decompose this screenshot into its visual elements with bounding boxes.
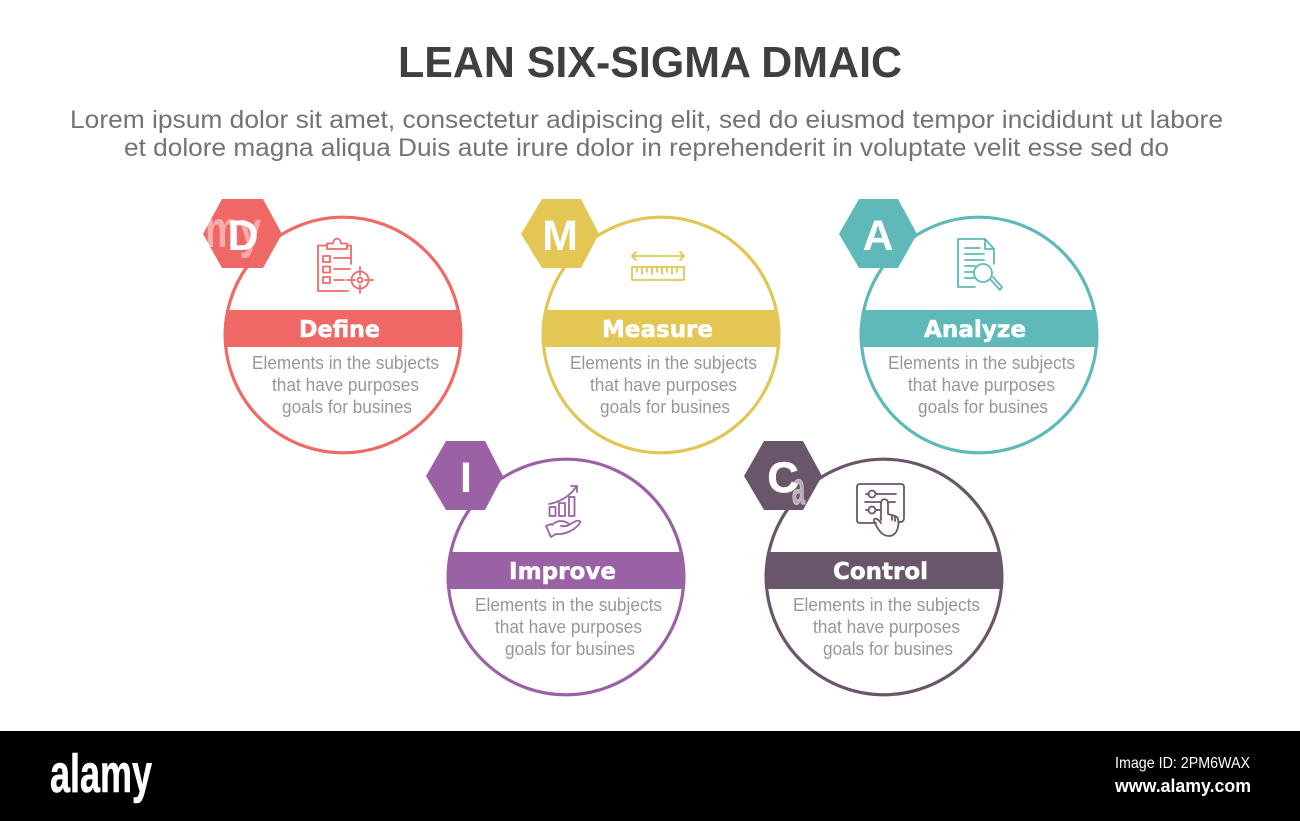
panel: improve: [426, 441, 689, 695]
heading band: [538, 310, 784, 347]
body text: that have purposes: [495, 617, 642, 637]
badge: M: M: [542, 212, 578, 260]
body text: goals for busines: [505, 639, 635, 659]
badge: C: a: [792, 463, 806, 514]
heading: Analyze: [924, 317, 1026, 343]
footer bar: [0, 731, 1300, 821]
heading: Control: [833, 559, 928, 585]
circle outline: [543, 217, 779, 453]
icon: clipboard with target: [318, 239, 373, 293]
circle outline: [766, 459, 1002, 695]
body text: Elements in the subjects: [888, 353, 1075, 373]
panel: analyze: [839, 199, 1102, 453]
body text: that have purposes: [590, 375, 737, 395]
circle outline: [448, 459, 684, 695]
heading band: [761, 552, 1007, 589]
watermark logo: alamy: [50, 744, 152, 804]
body text: goals for busines: [918, 397, 1048, 417]
image id: Image ID: 2PM6WAX: [1115, 755, 1250, 772]
website: www.alamy.com: [1114, 776, 1251, 796]
heading: Improve: [509, 559, 616, 585]
subtitle text block: Lorem ipsum dolor sit amet, consectetur adipiscing elit, sed do eiusmod tempor incididunt ut labore: [70, 106, 1223, 134]
badge: C: C: [767, 454, 799, 502]
body text: [888, 353, 1075, 417]
body text: goals for busines: [600, 397, 730, 417]
body text: [793, 595, 980, 659]
heading: Define: [299, 317, 380, 343]
subtitle text block: [70, 106, 1223, 162]
heading band: [443, 552, 689, 589]
panel: measure: [521, 199, 784, 453]
body text: Elements in the subjects: [475, 595, 662, 615]
body text: [252, 353, 439, 417]
badge: D: my: [205, 201, 261, 259]
heading band: [220, 310, 466, 347]
icon: growth chart on hand: [546, 486, 580, 537]
body text: goals for busines: [823, 639, 953, 659]
icon: ruler with arrow: [632, 252, 684, 280]
icon: document with magnifier: [958, 239, 1002, 290]
body text: [570, 353, 757, 417]
title: LEAN SIX-SIGMA DMAIC: [398, 38, 902, 87]
heading: Measure: [602, 317, 713, 343]
body text: [475, 595, 662, 659]
icon: touch control panel: [857, 484, 904, 536]
body text: Elements in the subjects: [252, 353, 439, 373]
badge: D: D: [227, 212, 259, 260]
badge: C: [744, 441, 822, 514]
body text: that have purposes: [813, 617, 960, 637]
body text: Elements in the subjects: [570, 353, 757, 373]
badge: I: I: [460, 454, 472, 502]
badge: I: [426, 441, 503, 510]
heading band: [856, 310, 1102, 347]
badge: A: A: [862, 212, 894, 260]
body text: goals for busines: [282, 397, 412, 417]
body text: Elements in the subjects: [793, 595, 980, 615]
circle outline: [861, 217, 1097, 453]
panel: define: [203, 199, 466, 453]
panel: control: [744, 441, 1007, 695]
circle outline: [225, 217, 461, 453]
badge: A: [839, 199, 917, 268]
badge: M: [521, 199, 599, 268]
body text: that have purposes: [272, 375, 419, 395]
body text: that have purposes: [908, 375, 1055, 395]
subtitle text block: et dolore magna aliqua Duis aute irure dolor in reprehenderit in voluptate velit esse sed do: [124, 134, 1169, 162]
